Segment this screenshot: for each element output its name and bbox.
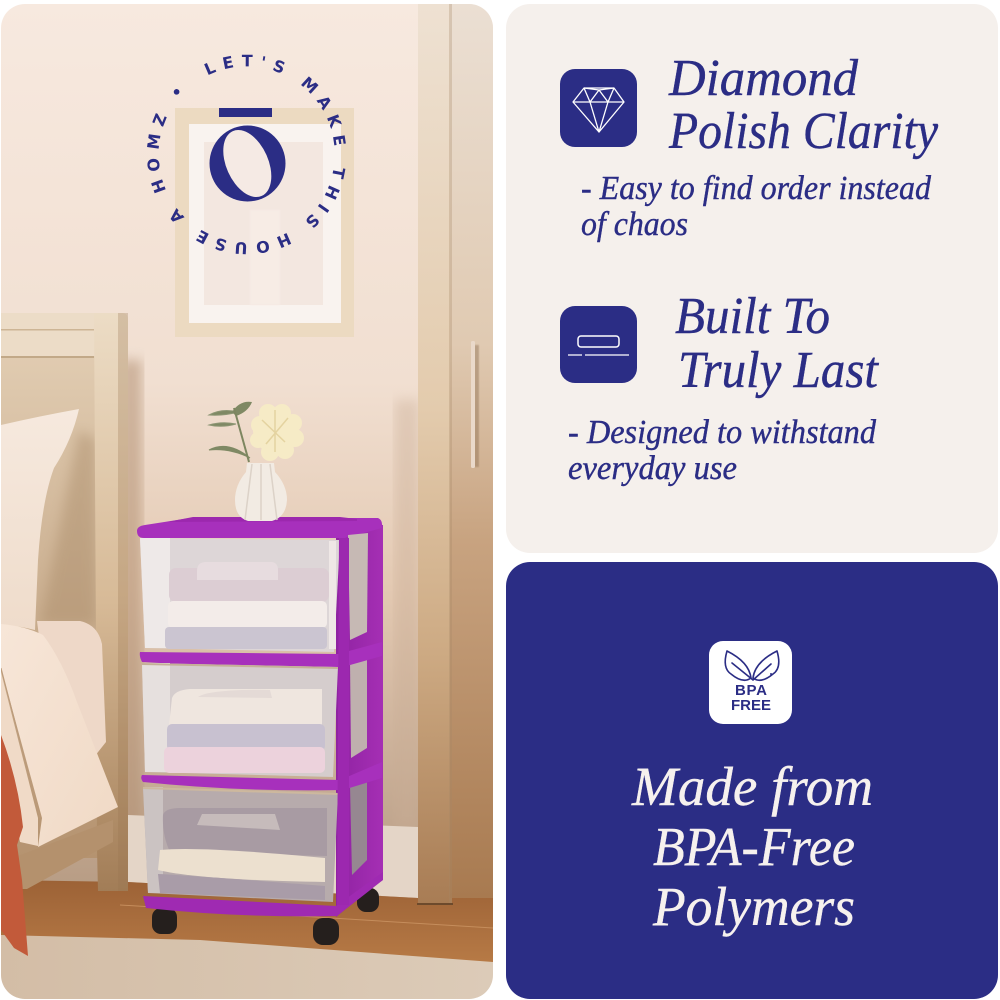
shelf 2: [141, 762, 382, 790]
icon: diamond: [560, 69, 637, 147]
heading: built to truly last: Truly Last: [678, 342, 879, 399]
heading: built to truly last: Built To: [675, 288, 830, 345]
shelf 1: [140, 642, 382, 667]
front right post: [337, 538, 349, 905]
icon: bpa free: [709, 641, 792, 724]
heading: made from bpa-free polymers: Made from: [631, 756, 873, 817]
icon: shelf: [560, 306, 637, 383]
bed post: [94, 313, 128, 891]
baseboard: [128, 815, 418, 898]
bed rail: [19, 828, 113, 889]
panel: bpa free: [506, 562, 998, 999]
drawer 3: [143, 787, 338, 902]
panel: features: [506, 4, 998, 553]
icon: bpa free: FREE: [731, 697, 771, 714]
side frame: [336, 525, 383, 917]
drawer 1: [140, 538, 340, 652]
wall picture frame: [175, 108, 354, 337]
logo: LET'S MAKE THIS HOUSE A HOMZ •: [147, 54, 346, 254]
heading: built to truly last: [675, 288, 879, 399]
text: easy to find order: of chaos: [581, 206, 688, 243]
drawer 2: [142, 663, 338, 777]
heading: made from bpa-free polymers: BPA-Free: [653, 816, 855, 877]
wall: [1, 4, 493, 904]
rug: [1, 935, 493, 999]
text: easy to find order: - Easy to find order instead: [581, 170, 932, 207]
orange throw: [1, 735, 28, 956]
door frame and door: [417, 4, 493, 905]
heading: diamond polish clarity: Polish Clarity: [668, 103, 939, 160]
mattress: [37, 621, 106, 754]
text: designed to withstand: - Designed to withstand: [568, 414, 877, 451]
stems and leaves: [209, 402, 252, 462]
heading: made from bpa-free polymers: Polymers: [652, 876, 855, 937]
flower head: [250, 404, 304, 461]
panel: room photo: [1, 4, 493, 999]
pillow: [1, 409, 79, 630]
storage cabinet: [137, 517, 383, 945]
heading: made from bpa-free polymers: [631, 756, 873, 937]
side windows: [348, 533, 368, 640]
blanket: [1, 624, 118, 847]
door handle: [471, 341, 475, 468]
floor: [1, 880, 493, 970]
text: designed to withstand: everyday use: [568, 450, 737, 487]
top lid: [137, 518, 382, 538]
sheet under blanket: [1, 672, 38, 846]
text: easy to find order: [581, 170, 932, 243]
headboard panel: [1, 356, 98, 858]
text: designed to withstand: [568, 414, 877, 487]
casters: [152, 888, 379, 945]
bottom rail: [143, 878, 383, 916]
icon: bpa free: BPA: [735, 682, 767, 699]
vase body: [235, 463, 287, 521]
heading: diamond polish clarity: [668, 50, 939, 160]
flower vase: [209, 402, 304, 521]
bed: [1, 313, 128, 956]
heading: diamond polish clarity: Diamond: [668, 50, 859, 107]
